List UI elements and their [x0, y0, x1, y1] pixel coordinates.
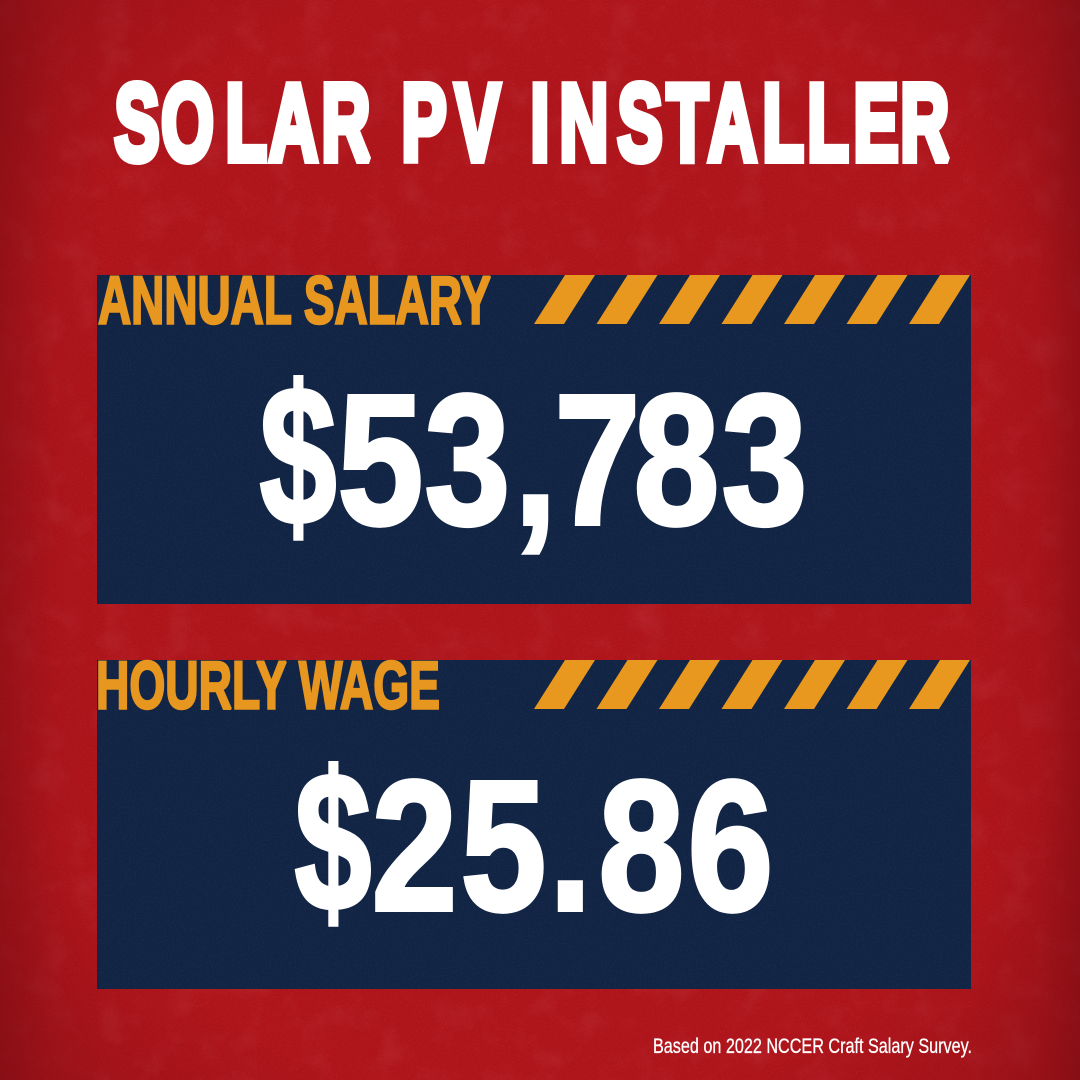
- salary figure: 53,783: [337, 356, 807, 564]
- heading: hourly wage: HOURLY WAGE: [96, 648, 440, 724]
- panel: annual salary: [97, 262, 971, 604]
- title: SOLAR PV INSTALLER: [114, 63, 949, 184]
- heading: annual salary: ANNUAL SALARY: [98, 262, 491, 338]
- hazard stripes: annual salary: [534, 275, 970, 324]
- source note: Based on 2022 NCCER Craft Salary Survey.: [653, 1035, 972, 1058]
- panel: hourly wage: [96, 648, 971, 989]
- hazard stripes: hourly wage: [534, 660, 970, 709]
- salary figure: $: [260, 346, 337, 567]
- wage figure: 25.86: [372, 742, 773, 950]
- wage figure: $: [294, 732, 372, 953]
